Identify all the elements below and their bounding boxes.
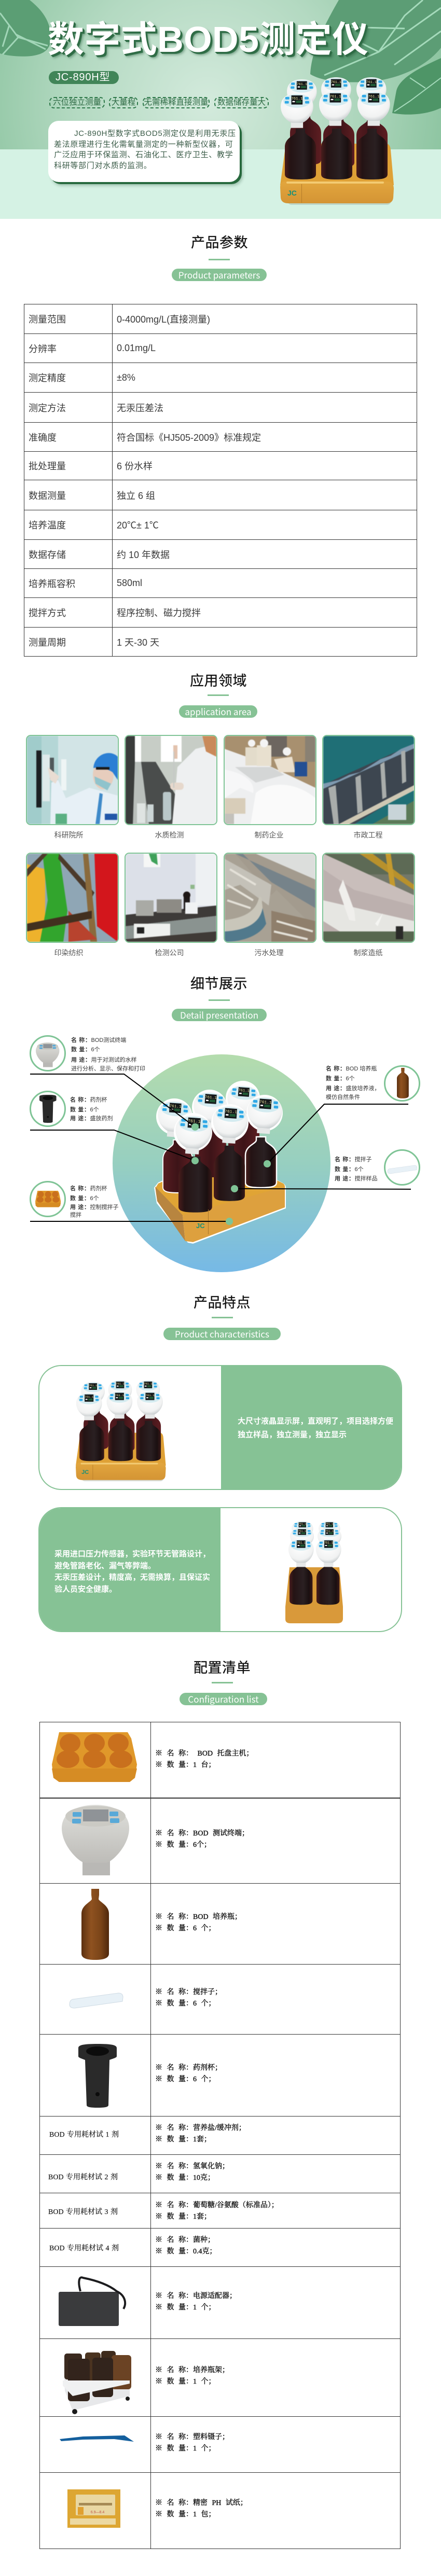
row: resolution: 0.01mg/L	[117, 343, 156, 353]
row: accuracy: 准确度	[29, 433, 57, 443]
leader lines and callout dots	[30, 1074, 411, 1225]
callout text: terminal: 进行分析、显示、保存和打印	[71, 1066, 145, 1072]
row: volume: 580ml	[117, 578, 142, 588]
callout text: stir bar: 名 称：搅拌子	[335, 1157, 371, 1163]
label: 制浆造纸	[354, 949, 383, 957]
pill: configuration list: Configuration list	[188, 1692, 259, 1705]
image: tray	[52, 1732, 137, 1782]
callout text: stir bar	[335, 1157, 377, 1182]
row: batch: 批处理量	[29, 461, 66, 471]
row text: cup: ※ 名 称：药剂杯； ※ 数 量：6 个；	[155, 2064, 222, 2083]
row: method	[24, 392, 417, 422]
label: 市政工程	[354, 831, 383, 839]
row: temperature	[24, 510, 417, 539]
row: period: 测量周期	[29, 637, 66, 647]
tag: storage: 数据储存量大	[217, 98, 266, 107]
main title: 数字式BOD5测定仪	[48, 19, 368, 60]
tag: six positions	[49, 97, 105, 108]
callout text: tray: 搅拌	[70, 1212, 81, 1218]
icon: terminal circle	[30, 1036, 65, 1070]
label: 污水处理	[254, 949, 283, 957]
row: data: 数据测量	[29, 491, 66, 501]
heading: detail presentation: 细节展示	[190, 972, 247, 993]
image: bottle rack	[63, 2351, 131, 2414]
model pill: JC-890H型	[56, 72, 110, 83]
row text: reagent 1: ※ 名 称：营养盐/缓冲剂； ※ 数 量：1套；	[155, 2124, 246, 2143]
icon: stir bar circle	[385, 1150, 419, 1185]
row: range: 测量范围	[29, 314, 66, 325]
image: pH paper	[67, 2489, 120, 2528]
hero background with leaves	[0, 0, 441, 149]
pill: detail presentation: Detail presentation	[180, 1008, 258, 1021]
row text: reagent 3: ※ 名 称：葡萄糖/谷氨酸（标准品）； ※ 数 量：1套；	[155, 2202, 279, 2221]
callout text: bottle: 数 量：6个	[326, 1076, 355, 1082]
pill: product characteristics: Product characteristics	[175, 1327, 269, 1340]
callout text: cup: 名 称：药剂杯	[70, 1097, 107, 1103]
row: accuracy	[24, 422, 417, 451]
tag: range: 大量程	[112, 98, 135, 107]
row: precision: 测定精度	[29, 373, 66, 383]
row: temperature: 20℃± 1℃	[117, 520, 159, 531]
row left: reagent 1: BOD 专用耗材试 1 剂	[49, 2131, 119, 2139]
green text block	[38, 1507, 220, 1632]
row text: rack: ※ 名 称：培养瓶架； ※ 数 量：1 个；	[155, 2366, 229, 2386]
card: textile	[26, 853, 119, 943]
hero product	[280, 77, 394, 205]
icon: tray circle	[30, 1181, 65, 1217]
row text: bottle: ※ 名 称：BOD 培养瓶； ※ 数 量：6 个；	[155, 1913, 242, 1932]
image: stir bar	[70, 1993, 123, 2008]
row: resolution: 分辨率	[29, 343, 57, 354]
row: batch	[24, 451, 417, 480]
heading: product characteristics: 产品特点	[194, 1291, 251, 1312]
feature text: 大尺寸液晶显示屏，直观明了，项目选择方便 独立样品，独立测量，独立显示	[238, 1417, 393, 1439]
row: data	[24, 480, 417, 510]
product image	[76, 1381, 166, 1481]
row: precision: ±8%	[117, 372, 135, 383]
row: storage: 数据存储	[29, 550, 66, 560]
callout text: tray	[70, 1186, 118, 1218]
image: reagent cup	[78, 2044, 117, 2108]
heading: configuration list: 配置清单	[194, 1656, 251, 1677]
row text: reagent 4: ※ 名 称：菌种； ※ 数 量：0.4克；	[155, 2236, 217, 2255]
parameter table	[24, 304, 417, 657]
row: period	[24, 627, 417, 657]
card: sewage	[224, 853, 316, 943]
green text block	[221, 1365, 403, 1490]
callout text: stir bar: 用 途：搅拌样品	[335, 1176, 377, 1182]
feature panel 1	[38, 1365, 402, 1490]
row text: tweezers: ※ 名 称：塑料镊子； ※ 数 量：1 个；	[155, 2433, 229, 2453]
row left: reagent 2: BOD 专用耗材试 2 剂	[48, 2174, 118, 2181]
hero banner	[0, 0, 441, 219]
row: range	[24, 304, 417, 333]
row: batch: 6 份水样	[117, 461, 153, 471]
callout text: terminal: 名 称：BOD测试终端	[71, 1037, 126, 1043]
pill: product parameters: Product parameters	[178, 268, 260, 281]
row: stirring	[24, 597, 417, 627]
row: method: 测定方法	[29, 402, 66, 413]
row: resolution	[24, 333, 417, 363]
card: paper	[322, 853, 415, 943]
callout text: bottle: 名 称：BOD 培养瓶	[326, 1066, 377, 1072]
callout text: tray: 数 量：6个	[70, 1195, 99, 1202]
row: storage	[24, 539, 417, 568]
card: water testing	[125, 735, 217, 825]
isometric product	[154, 1081, 286, 1244]
label: 水质检测	[155, 831, 184, 839]
row: accuracy: 符合国标《HJ505-2009》标准规定	[117, 433, 261, 443]
callout text: terminal	[71, 1037, 145, 1072]
row: range: 0-4000mg/L(直接测量)	[117, 314, 210, 325]
row text: stir bar: ※ 名 称：搅拌子； ※ 数 量：6 个；	[155, 1988, 222, 2008]
isometric product: JC	[196, 1222, 205, 1230]
row left: reagent 4: BOD 专用耗材试 4 剂	[49, 2245, 119, 2252]
image: tweezers	[60, 2435, 134, 2442]
label: 科研院所	[54, 831, 83, 839]
callout text: cup: 用 途：盛放药剂	[70, 1116, 113, 1122]
card: testing company	[125, 853, 217, 943]
row: storage: 约 10 年数据	[117, 550, 170, 560]
intro card	[48, 121, 240, 182]
callout text: stir bar: 数 量：6个	[335, 1166, 364, 1173]
row text: terminal: ※ 名 称：BOD 测试终端； ※ 数 量：6个；	[155, 1830, 249, 1849]
card: municipal	[322, 735, 415, 825]
callout text: tray: 用 途：控制搅拌子	[70, 1204, 118, 1210]
icon: bottle circle	[385, 1066, 419, 1101]
label: 印染纺织	[54, 949, 83, 957]
callout text: bottle	[326, 1065, 380, 1101]
row: stirring: 程序控制、磁力搅拌	[117, 608, 201, 618]
tag: six positions: 六位独立测量	[53, 98, 101, 107]
model pill	[49, 71, 119, 84]
row text: adapter: ※ 名 称：电源适配器； ※ 数 量：1 个；	[155, 2292, 237, 2312]
heading: product parameters: 产品参数	[191, 231, 248, 252]
pill: application area: application area	[185, 705, 252, 718]
row: volume	[24, 568, 417, 597]
row: precision	[24, 363, 417, 392]
callout text: tray: 名 称：药剂杯	[70, 1186, 107, 1192]
row: method: 无汞压差法	[117, 402, 163, 413]
row: stirring: 搅拌方式	[29, 608, 66, 618]
product side view	[285, 1521, 343, 1623]
image: pH paper: 6.9—8.4	[91, 2511, 104, 2514]
row: period: 1 天-30 天	[117, 637, 159, 647]
row left: reagent 3: BOD 专用耗材试 3 剂	[48, 2208, 118, 2216]
card: pharma	[224, 735, 316, 825]
image: bottle	[81, 1889, 109, 1960]
callout text: cup: 数 量：6个	[70, 1107, 99, 1113]
exploded product diagram	[30, 1035, 420, 1272]
callout text: bottle: 模仿自然条件	[326, 1094, 360, 1101]
row: temperature: 培养温度	[29, 520, 66, 531]
tag: storage	[214, 97, 269, 108]
tag: no dilution: 无需稀释直接测量	[144, 98, 209, 107]
callout text: bottle: 用 途：盛放培养液，	[326, 1085, 380, 1092]
icon: cup circle	[30, 1091, 65, 1126]
gradient circle	[113, 1054, 330, 1272]
image: power adapter	[59, 2277, 125, 2326]
label: 制药企业	[254, 831, 283, 839]
row: data: 独立 6 组	[117, 491, 155, 501]
card: research institutes	[26, 735, 119, 825]
image: terminal	[62, 1805, 129, 1875]
row text: reagent 2: ※ 名 称：氢氧化钠； ※ 数 量：10克；	[155, 2163, 229, 2182]
callout text: terminal: 用 途：用于对测试的水样	[71, 1057, 136, 1063]
row text: pH paper: ※ 名 称：精密 PH 试纸； ※ 数 量：1 包；	[155, 2499, 247, 2518]
configuration table	[39, 1722, 401, 2549]
callout text: terminal: 数 量：6个	[71, 1047, 100, 1053]
row text: tray: ※ 名 称： BOD 托盘主机； ※ 数 量：1 台；	[155, 1750, 254, 1769]
intro text: JC-890H型数字式BOD5测定仪是利用无汞压 差法原理进行生化需氧量测定的一种新型仪器，可 广泛应用于环保监测、石油化工、医疗卫生、教学 科研等部门对水质的监测。	[54, 129, 236, 170]
feature panel 2	[38, 1507, 402, 1632]
row images	[52, 1732, 137, 2528]
feature text: 采用进口压力传感器，实验环节无管路设计， 避免管路老化、漏气等弊端。 无汞压差设计，精度高，无需换算，且保证实 验人员安全健康。	[54, 1550, 210, 1594]
feature tags	[49, 97, 269, 108]
heading: application area: 应用领域	[190, 670, 247, 690]
callout text: cup	[70, 1096, 113, 1122]
label: 检测公司	[155, 949, 184, 957]
row: volume: 培养瓶容积	[29, 579, 75, 589]
tag: range	[109, 97, 138, 108]
